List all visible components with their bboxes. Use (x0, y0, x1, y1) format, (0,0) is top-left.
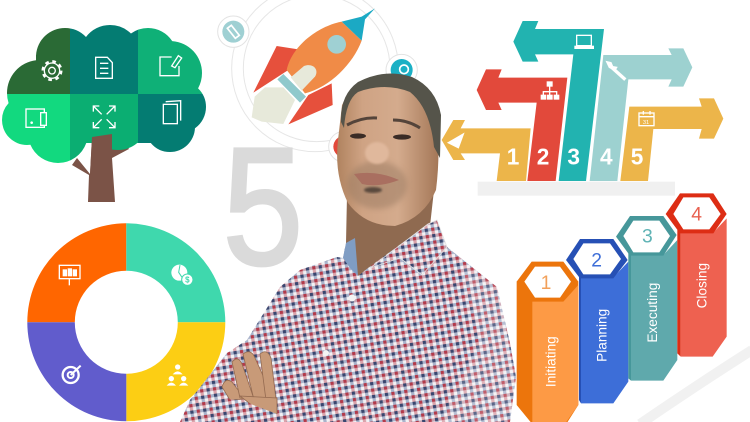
numbered arrows (442, 21, 723, 196)
arrow numbers: 4 (600, 143, 613, 169)
sleeve cuff (180, 398, 320, 422)
column 3 executing (616, 216, 677, 381)
column 1 initiating: 1 (541, 273, 551, 294)
shirt (180, 220, 516, 422)
arrow 2 (477, 69, 567, 181)
folded hand (222, 352, 277, 414)
column 4 closing (666, 193, 727, 357)
column 2 planning (566, 239, 628, 403)
hair (341, 73, 441, 158)
neck (346, 190, 434, 276)
rocket illustration (218, 0, 417, 162)
column 1 initiating: Initiating (543, 336, 558, 387)
arrow 1 (442, 120, 531, 181)
goatee (364, 187, 382, 193)
arrow numbers: 2 (537, 143, 549, 169)
donut chart (27, 223, 225, 421)
column 2 planning: 2 (591, 250, 602, 271)
tree trunk (72, 134, 129, 202)
ears and skin (337, 80, 438, 226)
presenter portrait (180, 73, 516, 422)
shirt buttons (323, 294, 356, 356)
donut segments (27, 223, 225, 421)
column 4 closing: 4 (691, 204, 702, 225)
column 2 planning: Planning (595, 309, 610, 362)
arrow 5 (620, 98, 723, 181)
arrow icons (448, 35, 654, 148)
arrow numbers: 3 (567, 143, 580, 169)
nose (365, 142, 389, 164)
arrow numbers: 1 (507, 143, 519, 169)
arrow 3 (513, 21, 604, 181)
shirt highlight (440, 262, 516, 422)
eyebrows (347, 118, 420, 128)
column 1 initiating (517, 262, 578, 422)
arrow numbers: 5 (631, 143, 643, 169)
collar (343, 220, 447, 276)
tree icons (26, 56, 182, 128)
trunk overlap (90, 134, 112, 175)
column 3 executing: Executing (645, 283, 660, 343)
arrow base (478, 182, 675, 196)
donut icons: $ (185, 276, 190, 285)
donut icons (59, 265, 193, 386)
arrow 4 (590, 48, 692, 181)
process columns (517, 193, 727, 422)
stubble (347, 161, 407, 209)
big number 5: 5 (223, 114, 303, 300)
arrow icons: 31 (643, 120, 649, 126)
canopy sections (0, 20, 208, 169)
mouth (354, 173, 399, 185)
head (337, 73, 441, 226)
eyes (350, 133, 366, 139)
tree with six icon sections (0, 20, 208, 202)
column 4 closing: Closing (695, 263, 710, 308)
column 3 executing: 3 (642, 226, 653, 247)
arrow numbers (507, 143, 643, 169)
background arc (640, 350, 750, 422)
